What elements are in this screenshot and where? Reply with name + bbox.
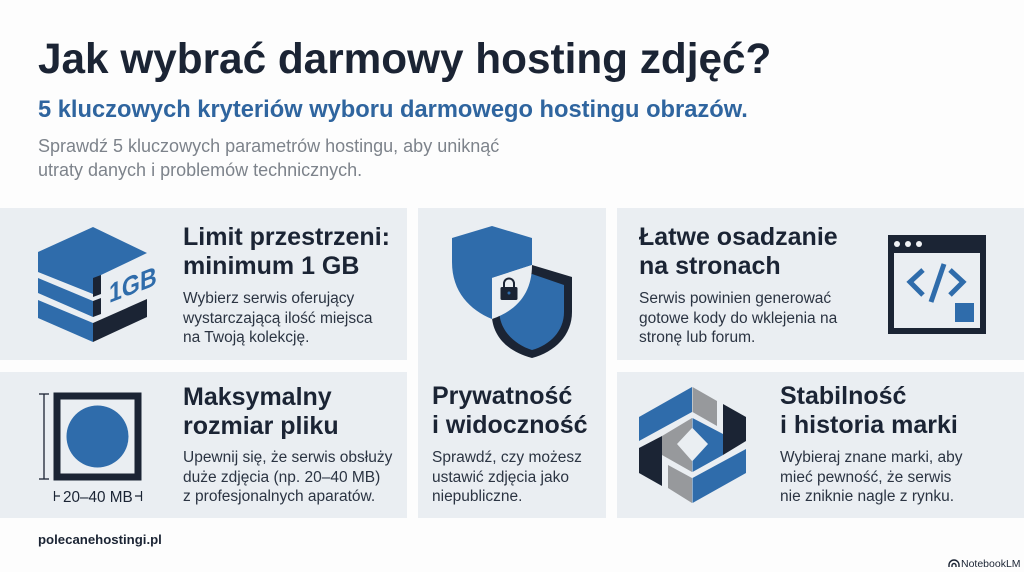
- description: nie zniknie nagle z rynku.: [780, 488, 954, 505]
- panel: stability: [617, 372, 1024, 518]
- heading: [183, 383, 339, 440]
- icon: overlapping shields with padlock: [452, 226, 572, 358]
- description: [183, 290, 372, 346]
- description: Sprawdź, czy możesz: [432, 449, 582, 466]
- description: Serwis powinien generować: [639, 290, 831, 307]
- panel: storage limit: [0, 208, 407, 360]
- heading: [780, 382, 958, 438]
- intro text: Sprawdź 5 kluczowych parametrów hostingu, aby uniknąć: [38, 136, 499, 156]
- heading: [432, 382, 588, 438]
- panel: easy embedding: [617, 208, 1024, 360]
- subtitle: 5 kluczowych kryteriów wyboru darmowego hostingu obrazów.: [38, 97, 748, 123]
- heading: [639, 223, 838, 280]
- description: [780, 449, 962, 505]
- website footer: polecanehostingi.pl: [38, 532, 162, 547]
- heading: na stronach: [639, 252, 781, 280]
- heading: Stabilność: [780, 382, 906, 410]
- description: [183, 449, 392, 505]
- title: Jak wybrać darmowy hosting zdjęć?: [38, 35, 771, 82]
- heading: rozmiar pliku: [183, 412, 339, 440]
- description: niepubliczne.: [432, 488, 522, 505]
- heading: i historia marki: [780, 410, 958, 438]
- icon: 1 GB stacked cube: [38, 227, 157, 342]
- description: duże zdjęcia (np. 20–40 MB): [183, 468, 380, 486]
- heading: Łatwe osadzanie: [639, 223, 838, 251]
- icon: image frame with size dimensions: 20–40 MB: [63, 489, 133, 506]
- heading: minimum 1 GB: [183, 252, 359, 280]
- intro text: [38, 136, 499, 180]
- description: wystarczającą ilość miejsca: [183, 310, 372, 326]
- description: gotowe kody do wklejenia na: [639, 310, 837, 326]
- description: Wybierz serwis oferujący: [183, 290, 354, 307]
- heading: Limit przestrzeni:: [183, 223, 390, 251]
- panel: privacy: [418, 208, 606, 518]
- description: [432, 449, 582, 505]
- description: ustawić zdjęcia jako: [432, 468, 569, 486]
- description: na Twoją kolekcję.: [183, 329, 309, 346]
- NotebookLM badge: NotebookLM: [961, 558, 1021, 570]
- description: [639, 290, 838, 346]
- heading: Prywatność: [432, 382, 572, 410]
- description: Upewnij się, że serwis obsłuży: [183, 449, 392, 466]
- icon: browser window with code: [888, 235, 986, 334]
- panel: maximum file size: [0, 372, 407, 518]
- icon: image frame with size dimensions: [39, 392, 142, 506]
- icon: 1 GB stacked cube: 1GB: [109, 262, 157, 309]
- description: z profesjonalnych aparatów.: [183, 488, 375, 505]
- description: mieć pewność, że serwis: [780, 468, 951, 486]
- heading: Maksymalny: [183, 383, 332, 411]
- intro text: utraty danych i problemów technicznych.: [38, 160, 362, 180]
- description: Wybieraj znane marki, aby: [780, 449, 962, 466]
- heading: [183, 223, 390, 280]
- description: stronę lub forum.: [639, 329, 755, 346]
- heading: i widoczność: [432, 410, 588, 438]
